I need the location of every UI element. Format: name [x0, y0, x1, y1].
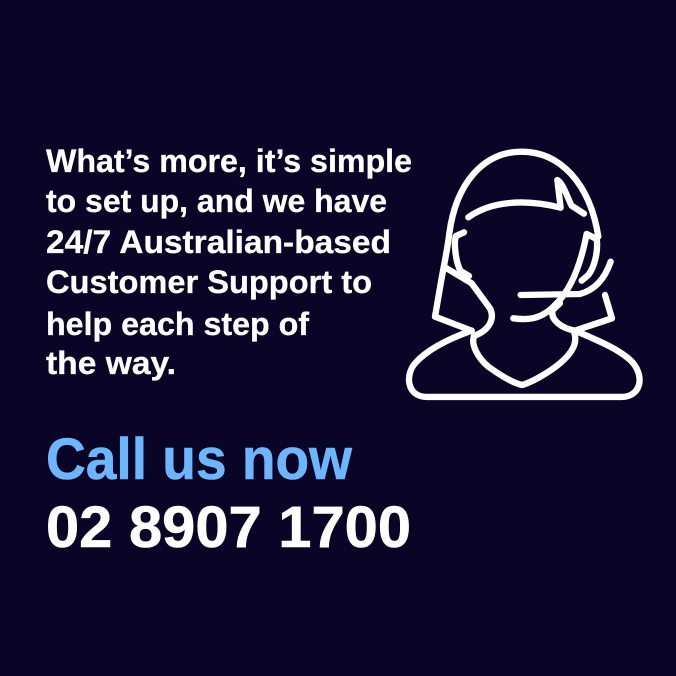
text block: support message: 24/7 Australian-based — [46, 224, 391, 260]
heading: call us now: Call us now — [46, 427, 353, 492]
headset mic boom — [513, 234, 587, 319]
phone number: 02 8907 1700 — [46, 495, 411, 560]
text block: support message: to set up, and we have — [46, 183, 387, 219]
text block: support message: What’s more, it’s simple — [46, 143, 412, 179]
text block: support message: the way. — [46, 345, 176, 381]
text block: support message — [46, 143, 412, 381]
lower right hair — [552, 295, 612, 331]
neck and collar — [473, 332, 575, 385]
shoulders — [409, 331, 640, 397]
hair outline — [435, 152, 598, 331]
headset mic arm — [521, 262, 611, 295]
text block: support message: Customer Support to — [46, 264, 372, 300]
text block: support message: help each step of — [46, 306, 309, 342]
right ear — [582, 234, 597, 281]
icon: customer support agent with headset — [409, 152, 640, 397]
left ear — [455, 232, 469, 276]
fringe — [468, 180, 584, 217]
lower left hair — [447, 268, 492, 336]
